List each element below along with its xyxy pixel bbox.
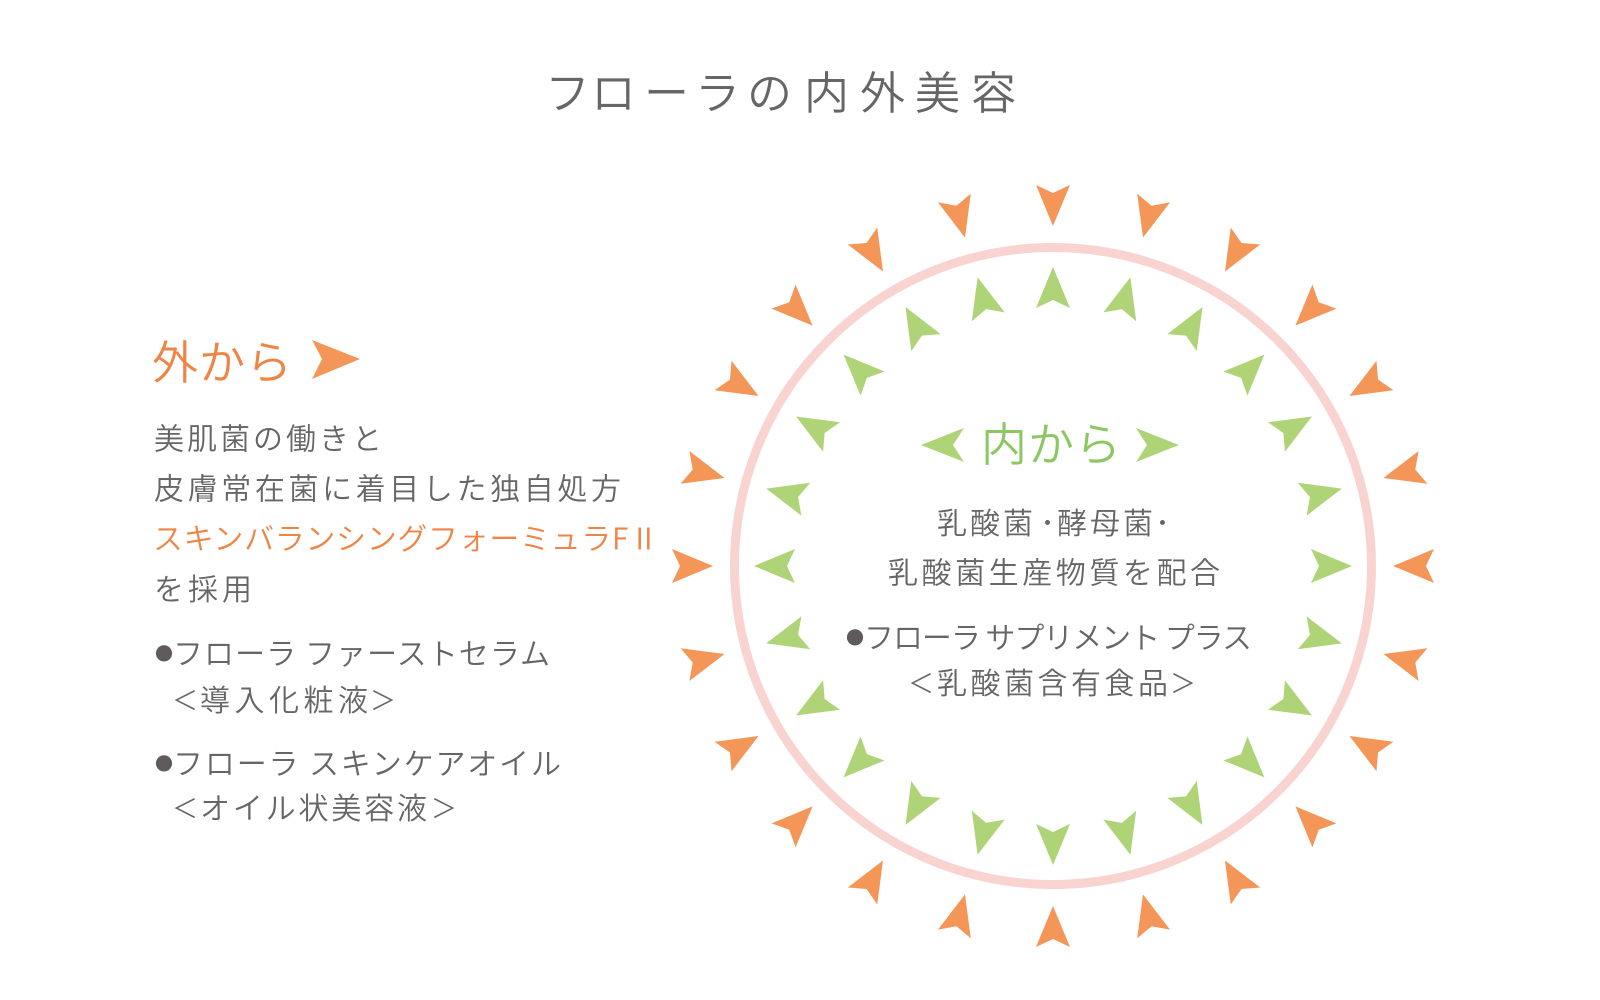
text block: supplement: ＞ xyxy=(1170,664,1196,701)
text block: ingredients: 乳酸菌 xyxy=(937,499,1036,543)
text block: first serum: ＜ xyxy=(172,681,198,718)
text block: supplement: 乳酸菌含有食品 xyxy=(937,659,1168,703)
heading: from outside: 外から xyxy=(152,327,292,393)
text block: skincare oil: ＜ xyxy=(172,789,198,826)
text block: ingredients: ･ xyxy=(1040,499,1058,543)
arrow: heading arrow right xyxy=(312,340,360,379)
heading: from inside: 内から xyxy=(981,409,1121,475)
text block: formula description: 皮膚常在菌に着目した独自処方 xyxy=(154,464,621,508)
text block: first serum: 導入化粧液 xyxy=(200,676,368,720)
text block: skincare oil: フローラ スキンケアオイル xyxy=(173,740,561,784)
text block: skincare oil: ● xyxy=(155,750,173,776)
text block: formula description: 美肌菌の働きと xyxy=(154,414,382,458)
text block: supplement xyxy=(846,614,1252,703)
arrows: outer orange ring xyxy=(672,185,1434,947)
text block: skincare oil xyxy=(155,740,561,828)
text block: formula description: を採用 xyxy=(154,565,252,609)
text block: ingredients: ･ xyxy=(1155,499,1173,543)
text block: first serum xyxy=(155,630,550,720)
text block: formula description xyxy=(153,414,659,609)
text block: supplement: ● xyxy=(846,624,864,650)
text block: first serum: ● xyxy=(155,640,173,666)
panel: from inside xyxy=(846,409,1252,703)
text block: ingredients: 酵母菌 xyxy=(1057,499,1156,543)
text block: ingredients: 乳酸菌生産物質を配合 xyxy=(888,548,1220,592)
text block: supplement: ＜ xyxy=(908,664,934,701)
circle ring xyxy=(734,248,1372,884)
text block: first serum: ＞ xyxy=(370,681,396,718)
arrows: inner green ring xyxy=(754,267,1352,865)
text block: ingredients xyxy=(888,499,1220,592)
text block: supplement: フローラ サプリメント プラス xyxy=(864,614,1252,658)
panel: from outside xyxy=(152,327,659,828)
text block: skincare oil: ＞ xyxy=(431,789,457,826)
arrow: heading arrow right xyxy=(1136,428,1179,462)
text block: skincare oil: オイル状美容液 xyxy=(200,784,427,828)
title: フローラの内外美容 xyxy=(545,57,1016,122)
text block: first serum: フローラ ファーストセラム xyxy=(173,630,550,674)
arrow: heading arrow left xyxy=(921,428,964,462)
text block: formula description: スキンバランシングフォーミュラFⅡ xyxy=(153,514,659,558)
